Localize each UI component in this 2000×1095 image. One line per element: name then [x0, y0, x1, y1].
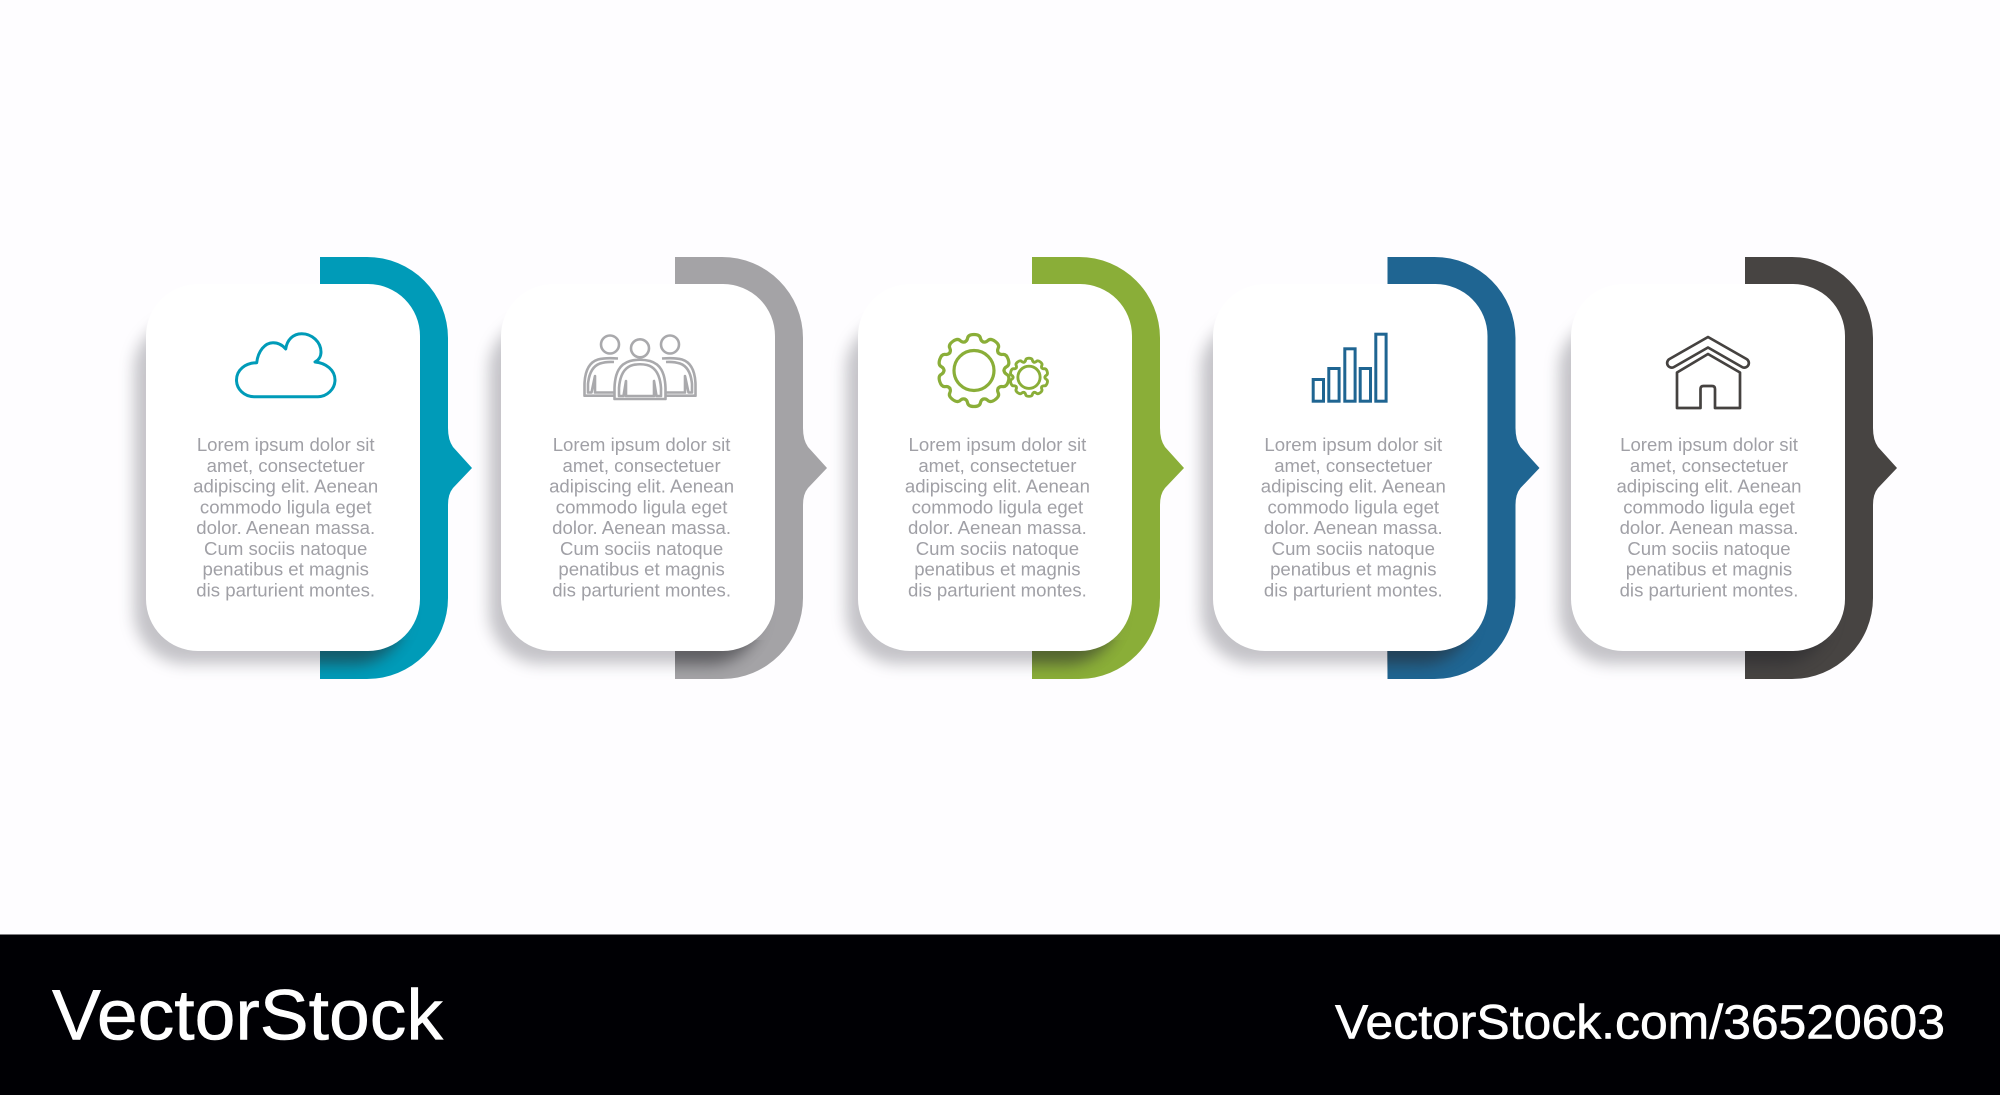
text block: commodo ligula eget	[1268, 496, 1440, 517]
text block: dolor. Aenean massa.	[908, 517, 1087, 538]
text block: adipiscing elit. Aenean	[193, 476, 378, 496]
card shadow	[1201, 318, 1473, 664]
text block: dis parturient montes.	[1264, 579, 1443, 600]
text block: dis parturient montes.	[1620, 579, 1798, 600]
panel: step 5 house	[1559, 257, 1897, 679]
card shadow	[134, 318, 406, 664]
text block: commodo ligula eget	[1623, 496, 1796, 517]
text block: penatibus et magnis	[558, 558, 725, 580]
bracket arrow: blue	[1388, 257, 1540, 679]
text block: dis parturient montes.	[552, 579, 731, 600]
bracket arrow: teal	[320, 257, 472, 679]
icon: cloud	[236, 334, 335, 397]
text block: dolor. Aenean massa.	[552, 517, 731, 538]
footer url text: VectorStock.com/36520603	[1335, 996, 1945, 1050]
text block: amet, consectetuer	[1274, 455, 1432, 476]
icon: gears	[937, 334, 1049, 406]
footer logo text: VectorStock	[52, 976, 444, 1056]
text block: Lorem ipsum dolor sit	[553, 434, 731, 455]
text block: Lorem ipsum dolor sit	[197, 434, 375, 455]
text block: amet, consectetuer	[918, 455, 1076, 476]
card shadow	[846, 318, 1118, 664]
white card	[858, 284, 1132, 651]
text block: adipiscing elit. Aenean	[1261, 476, 1446, 496]
white card	[1213, 284, 1488, 651]
text block: dolor. Aenean massa.	[1264, 517, 1443, 538]
text block: Cum sociis natoque	[1272, 538, 1435, 559]
text block: penatibus et magnis	[202, 558, 369, 580]
text block: dolor. Aenean massa.	[196, 517, 375, 538]
text block: penatibus et magnis	[1270, 558, 1437, 580]
bracket arrow: green	[1032, 257, 1184, 679]
card shadow	[489, 318, 761, 664]
text block: commodo ligula eget	[556, 496, 728, 517]
text block: amet, consectetuer	[563, 455, 721, 476]
text block: Cum sociis natoque	[560, 538, 723, 559]
white card	[501, 284, 775, 651]
panel: step 4 bar chart	[1201, 257, 1540, 679]
text block: commodo ligula eget	[912, 496, 1084, 517]
text block: Cum sociis natoque	[204, 538, 367, 559]
text block: Cum sociis natoque	[1627, 538, 1791, 559]
text block: Cum sociis natoque	[916, 538, 1079, 559]
icon: bar chart	[1313, 334, 1386, 401]
text block: commodo ligula eget	[200, 496, 372, 517]
text block: amet, consectetuer	[207, 455, 365, 476]
white card	[146, 284, 420, 651]
text block: Lorem ipsum dolor sit	[1620, 434, 1799, 455]
panel: step 2 people	[489, 257, 827, 679]
text block: dis parturient montes.	[908, 579, 1087, 600]
text block: dis parturient montes.	[196, 579, 375, 600]
footer bar	[0, 934, 2000, 1095]
text block: adipiscing elit. Aenean	[1616, 476, 1802, 496]
text block: Lorem ipsum dolor sit	[909, 434, 1087, 455]
text block: Lorem ipsum dolor sit	[1264, 434, 1443, 455]
text block: amet, consectetuer	[1630, 455, 1788, 476]
text block: dolor. Aenean massa.	[1620, 517, 1798, 538]
white card	[1571, 284, 1845, 651]
text block: adipiscing elit. Aenean	[549, 476, 734, 496]
icon: house	[1667, 337, 1749, 408]
bracket arrow: grey	[675, 257, 827, 679]
text block: adipiscing elit. Aenean	[905, 476, 1090, 496]
text block: penatibus et magnis	[914, 558, 1081, 580]
panel: step 1 cloud	[134, 257, 472, 679]
bracket arrow: dark grey	[1745, 257, 1897, 679]
card shadow	[1559, 318, 1831, 664]
panel: step 3 gears	[846, 257, 1184, 679]
text block: penatibus et magnis	[1626, 558, 1792, 580]
icon: people	[584, 336, 696, 399]
